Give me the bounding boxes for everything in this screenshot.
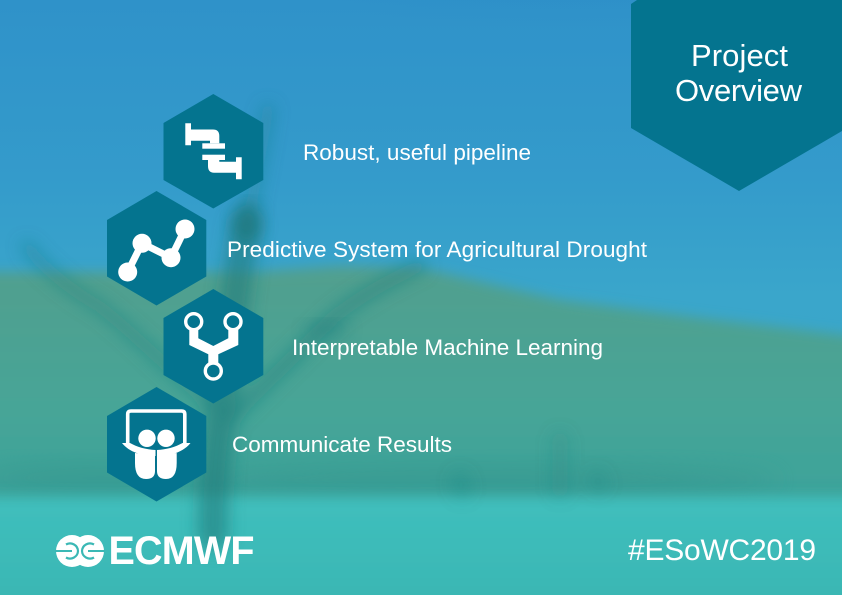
icon: line graph [118,220,194,282]
label: communicate results: Communicate Results [232,432,452,457]
hashtag: #ESoWC2019 [628,534,816,567]
icon: branching circuit [186,314,241,379]
icon: pipes [185,123,242,179]
hexagon: pipeline [164,94,263,208]
label: predictive system: Predictive System for Agricultural Drought [227,237,648,262]
hexagon: interpretable ML [164,289,263,404]
panel: project overview banner [631,0,842,191]
icon: ECMWF mark [55,535,105,567]
heading: project overview [675,38,803,108]
label: interpretable ML: Interpretable Machine Learning [292,335,603,360]
icon: slideshare presenters [122,411,190,479]
hexagon: communicate results [107,387,206,502]
heading: project overview: Overview [675,73,803,108]
logo: ECMWF: ECMWF [108,529,254,573]
heading: project overview: Project [691,38,788,73]
label: robust pipeline: Robust, useful pipeline [303,140,531,165]
hexagon: predictive system [107,191,206,306]
